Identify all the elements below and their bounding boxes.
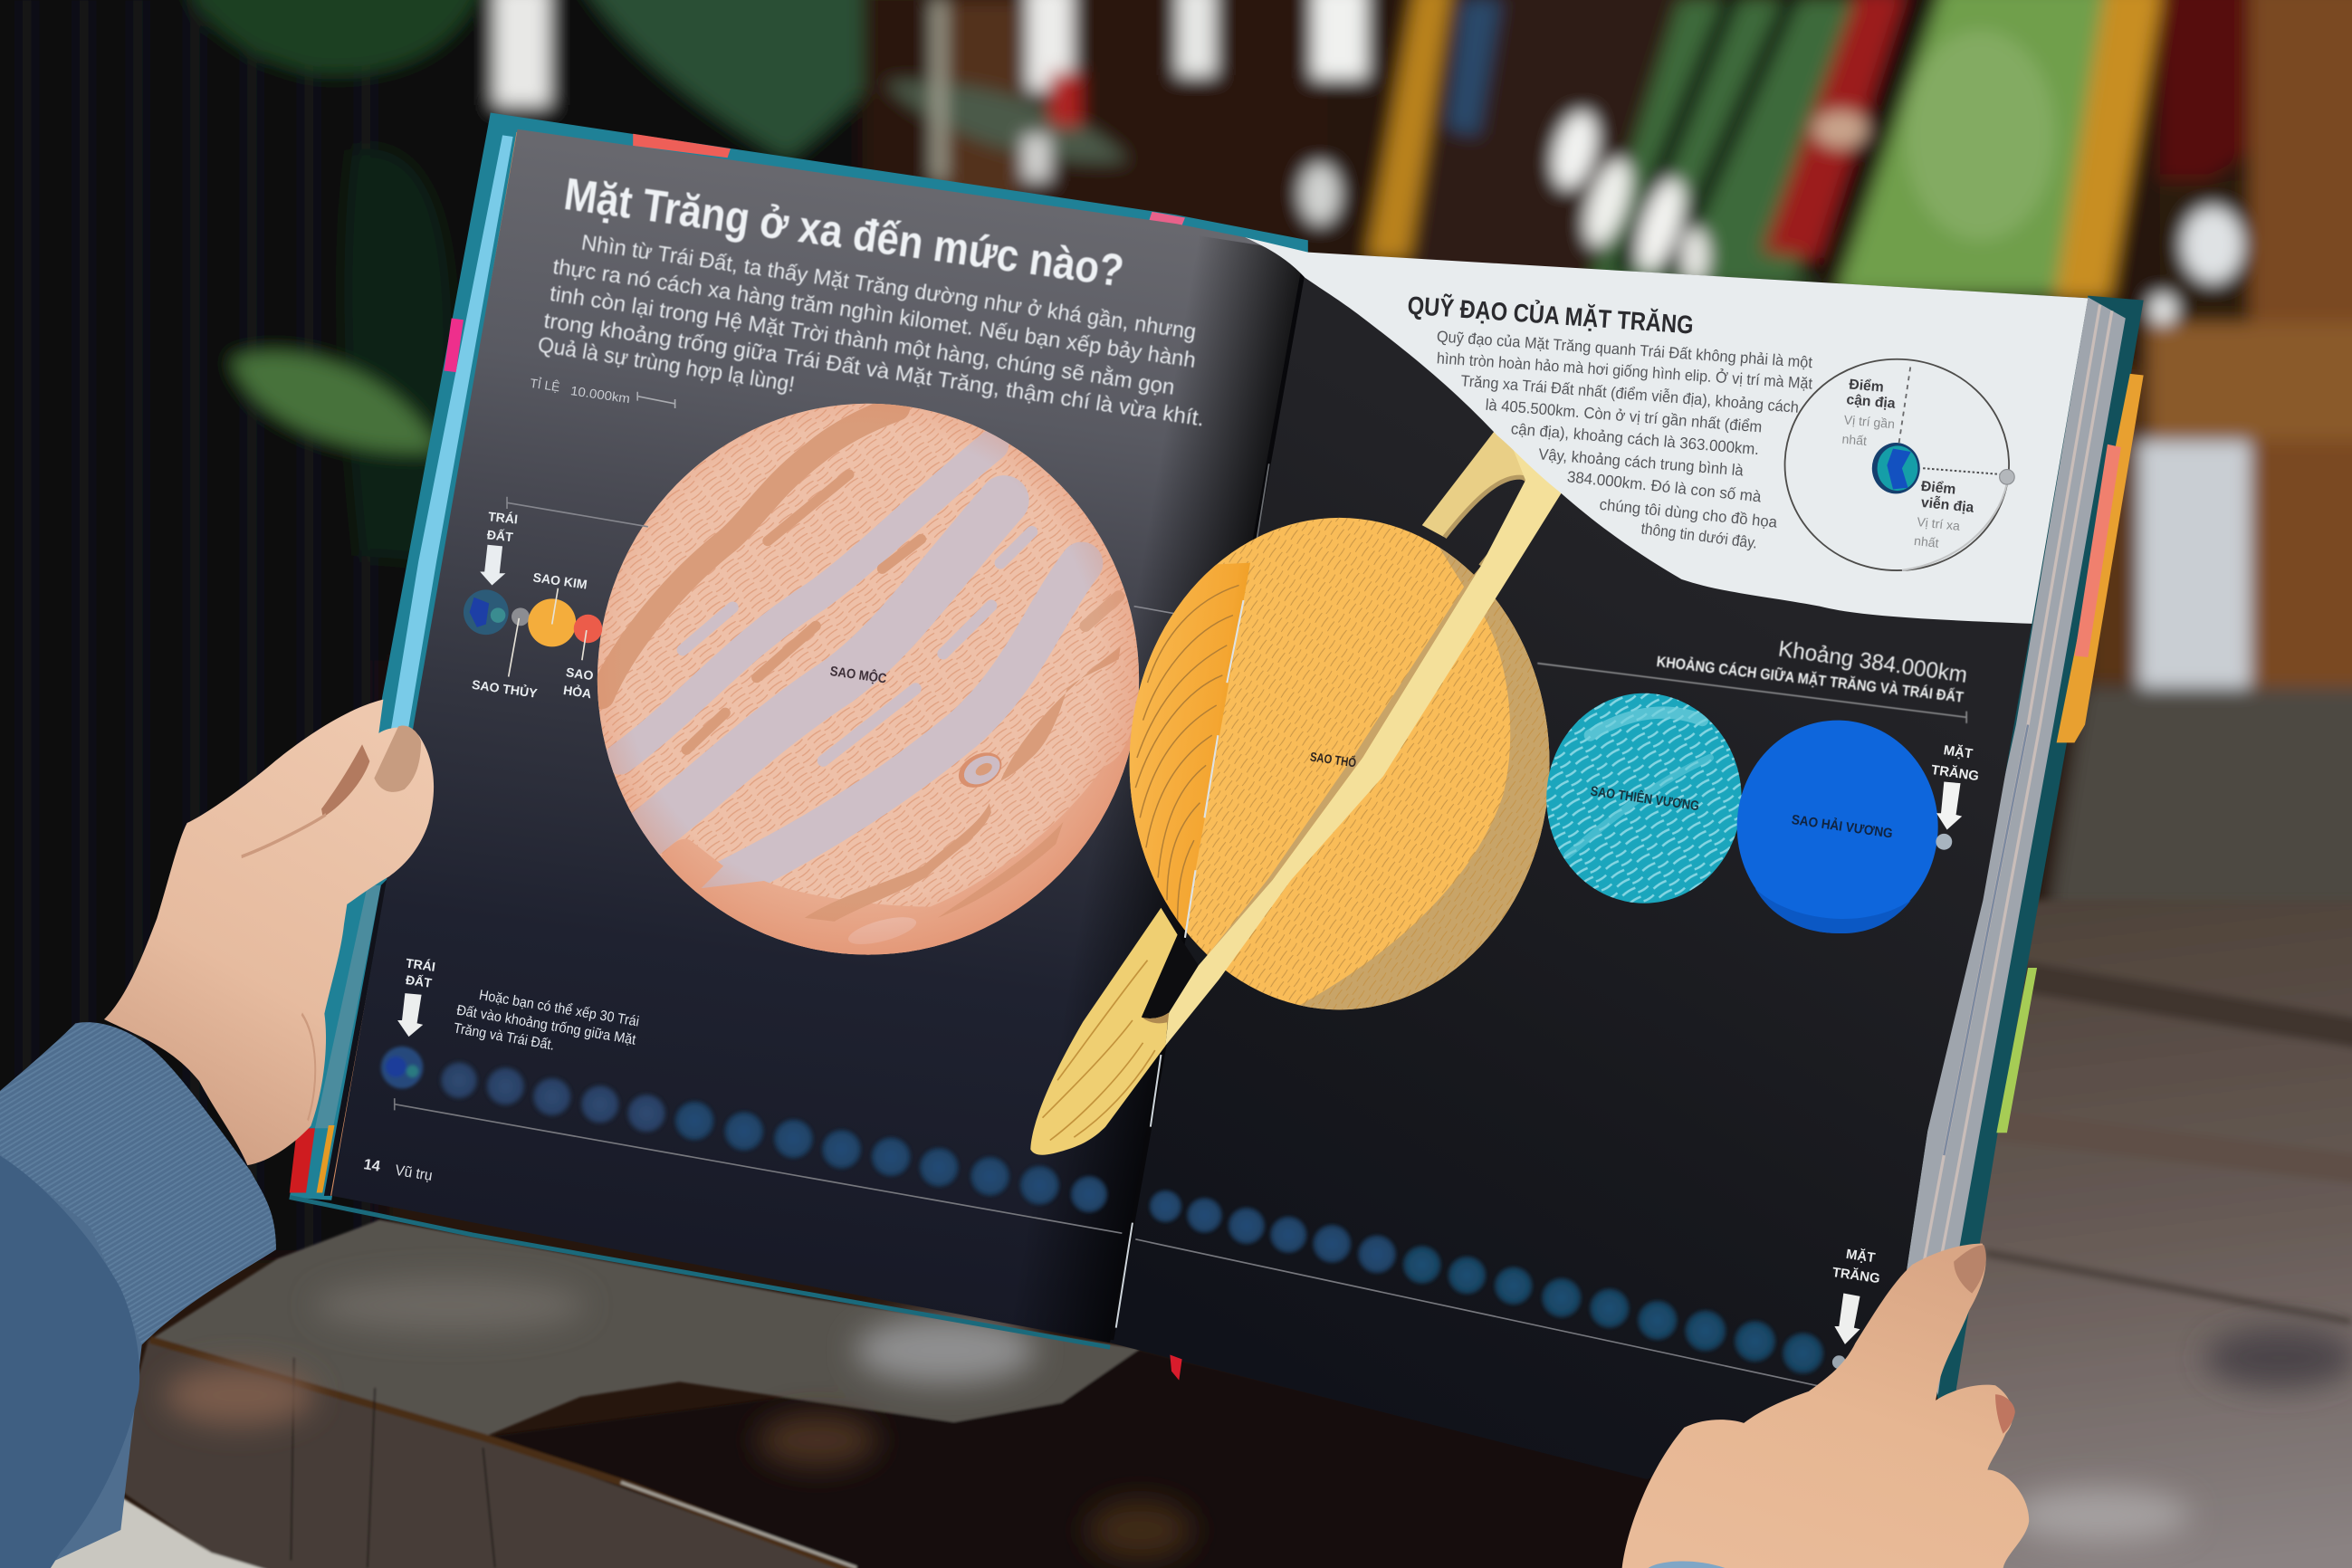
orbit panel paragraph: Vậy, khoảng cách trung bình là <box>1538 445 1745 480</box>
label: Neptune: SAO HẢI VƯƠNG <box>1791 812 1894 842</box>
labels: perigee and apogee <box>1841 376 1975 550</box>
palm crease <box>242 815 326 1121</box>
labels: perigee and apogee: nhất <box>1914 533 1940 550</box>
orbit panel paragraph: chúng tôi dùng cho đồ họa <box>1599 495 1778 531</box>
open book <box>290 113 2144 1479</box>
labels: perigee and apogee: Điểm <box>1849 376 1885 396</box>
orbit panel paragraph <box>1436 327 1813 552</box>
spine crease <box>1112 253 1306 1340</box>
page number and section name <box>362 1155 434 1184</box>
finger gap shadow <box>321 744 369 817</box>
orbit panel paragraph: là 405.500km. Còn ở vị trí gần nhất (điểm <box>1485 396 1763 435</box>
icon: Moon on orbit <box>2000 470 2014 484</box>
label: Moon with arrow and icon <box>1930 742 1980 850</box>
left cover edge <box>290 113 1308 1347</box>
labels: inner planets: SAO KIM <box>532 569 588 592</box>
hand: right hand <box>1622 1244 2029 1568</box>
label: Earth with arrow <box>480 509 519 585</box>
right page <box>1110 253 2088 1479</box>
labels: perigee and apogee: nhất <box>1841 432 1868 448</box>
left page <box>331 129 1305 1343</box>
label: Earth with arrow, lower row: TRÁI <box>405 955 436 974</box>
intro paragraph: tinh còn lại trong Hệ Mặt Trời thành một hàng, chúng sẽ nằm gọn <box>549 282 1176 400</box>
orbit panel paragraph: Quỹ đạo của Mặt Trăng quanh Trái Đất không phải là một <box>1436 327 1813 371</box>
label: Moon with arrow, lower row: TRĂNG <box>1831 1265 1881 1286</box>
callout: thirty Earths <box>453 987 640 1054</box>
left hand <box>104 700 434 1165</box>
heading: main title: Mặt Trăng ở xa đến mức nào? <box>561 168 1127 297</box>
Saturn body <box>1130 518 1550 1009</box>
hand: left hand and sleeve <box>0 700 434 1568</box>
label: Moon with arrow and icon: TRĂNG <box>1930 762 1980 784</box>
labels: perigee and apogee: cận địa <box>1846 392 1897 412</box>
lower spine highlights <box>1116 1055 1161 1328</box>
label: Earth with arrow: ĐẤT <box>486 527 514 544</box>
white orbit panel on right page <box>1245 237 2088 624</box>
spine gap on Saturn <box>1185 600 1244 938</box>
ring shadow on Saturn <box>1200 566 1481 965</box>
wooden table, left side <box>0 1219 1658 1568</box>
label: Jupiter: SAO MỘC <box>829 663 888 687</box>
icon: Earth <box>464 589 509 635</box>
scale legend: TỈ LỆ <box>529 376 561 394</box>
labels: perigee and apogee: Vị trí gần <box>1843 412 1896 431</box>
fingernail <box>1954 1245 1986 1294</box>
labels: inner planets: HỎA <box>562 682 593 701</box>
labels: inner planets <box>471 569 595 701</box>
table patches, right side <box>2010 1328 2352 1543</box>
page number and section name: Vũ trụ <box>394 1162 434 1184</box>
table highlights, left side <box>165 1278 1192 1560</box>
thumbnail <box>374 726 421 792</box>
Saturn ring back top <box>1422 427 1567 566</box>
label: Moon with arrow and icon: MẶT <box>1943 742 1974 762</box>
second fingernail <box>1995 1394 2015 1434</box>
label: Moon with arrow, lower row <box>1831 1247 1881 1369</box>
planet: Saturn <box>1030 427 1575 1155</box>
intro paragraph: thực ra nó cách xa hàng trăm nghìn kilomet. Nếu bạn xếp bảy hành <box>551 254 1198 373</box>
icon: Venus <box>528 598 576 646</box>
Saturn ring front <box>1165 435 1567 1046</box>
orbit diagram <box>1785 359 2014 570</box>
callout: thirty Earths: Đất vào khoảng trống giữa Mặt <box>455 1003 637 1048</box>
orbit panel paragraph: thông tin dưới đây. <box>1640 519 1758 552</box>
distance heading and line <box>1537 637 1969 723</box>
distance line left <box>507 497 1192 617</box>
orbit panel paragraph: Trăng xa Trái Đất nhất (điểm viễn địa), khoảng cách <box>1460 371 1800 416</box>
planet: Uranus <box>1545 690 1747 908</box>
spine highlights <box>1256 464 1269 548</box>
row of 30 Earths <box>381 1047 1824 1374</box>
label: Uranus: SAO THIÊN VƯƠNG <box>1590 783 1700 814</box>
leader lines <box>509 588 587 677</box>
scale legend <box>529 376 675 408</box>
label: Earth with arrow, lower row: ĐẤT <box>405 972 433 990</box>
icon: Mercury <box>512 607 530 626</box>
labels: inner planets: SAO <box>565 664 595 683</box>
labels: inner planets: SAO THỦY <box>471 676 539 701</box>
intro paragraph: Quả là sự trùng hợp lạ lùng! <box>536 332 797 397</box>
icon: Earth on orbit <box>1872 443 1920 493</box>
inner planets group <box>464 509 602 701</box>
planet: Jupiter <box>598 404 1139 955</box>
right cover and page stack <box>1907 296 2144 1400</box>
intro paragraph: Nhìn từ Trái Đất, ta thấy Mặt Trăng dường như ở khá gần, nhưng <box>579 231 1198 345</box>
intro paragraph: trong khoảng trống giữa Trái Đất và Mặt Trăng, thậm chí là vừa khít. <box>542 309 1206 432</box>
labels: perigee and apogee: viễn địa <box>1920 493 1975 516</box>
callout: thirty Earths: Hoặc bạn có thể xếp 30 Trái <box>478 987 640 1030</box>
label: Earth with arrow, lower row <box>397 955 436 1037</box>
scale legend: 10.000km <box>569 383 631 406</box>
orbit panel paragraph: cận địa), khoảng cách là 363.000km. <box>1510 419 1760 458</box>
orbit panel heading: QUỸ ĐẠO CỦA MẶT TRĂNG <box>1407 291 1695 339</box>
wooden table, right side <box>1920 900 2352 1568</box>
label: Saturn: SAO THỔ <box>1309 748 1357 770</box>
planet: Neptune <box>1737 721 1938 933</box>
sleeve cuff <box>1648 1561 1726 1568</box>
label: Moon with arrow, lower row: MẶT <box>1845 1247 1876 1266</box>
label: Earth with arrow: TRÁI <box>487 509 519 527</box>
distance heading and line: KHOẢNG CÁCH GIỮA MẶT TRĂNG VÀ TRÁI ĐẤT <box>1656 652 1965 706</box>
labels: perigee and apogee: Vị trí xa <box>1917 514 1961 533</box>
labels: perigee and apogee: Điểm <box>1920 478 1956 498</box>
baseline distance line <box>395 1098 1827 1388</box>
distance heading and line: Khoảng 384.000km <box>1777 637 1969 688</box>
page number and section name: 14 <box>362 1155 382 1175</box>
sleeve <box>0 1022 276 1568</box>
intro paragraph <box>536 231 1206 432</box>
callout: thirty Earths: Trăng và Trái Đất. <box>453 1020 556 1054</box>
bookmark <box>1170 1354 1182 1381</box>
orbit panel paragraph: 384.000km. Đó là con số mà <box>1566 467 1763 506</box>
icon: Mars <box>574 615 602 643</box>
Saturn ring back lower <box>1030 908 1199 1155</box>
orbit panel paragraph: hình tròn hoàn hảo mà hơi giống hình elip. Ở vị trí mà Mặt <box>1436 349 1813 393</box>
